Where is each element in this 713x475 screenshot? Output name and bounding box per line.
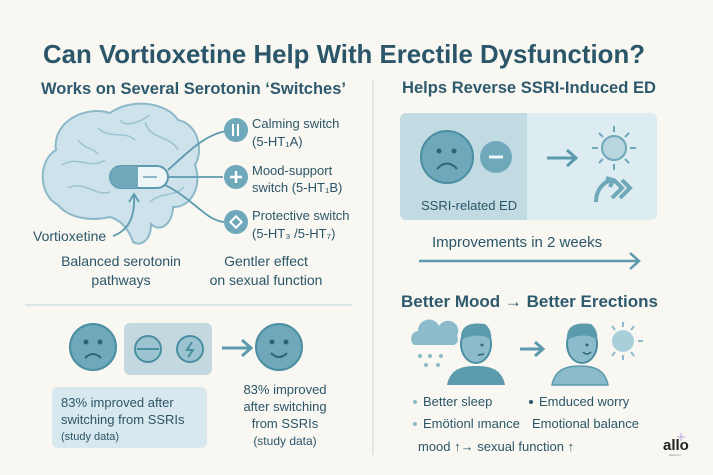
bullets: Emötionl ımance (423, 416, 520, 431)
panel: better mood (401, 292, 689, 457)
text: stat: 83% improved (243, 382, 327, 397)
callout box: (study data) (61, 431, 119, 443)
logo: allo: HEALTH (669, 453, 681, 457)
bullets: Emotional balance (532, 416, 639, 431)
panel: study results (52, 323, 327, 448)
text: switch labels: Protective switch (252, 208, 350, 223)
panel: reverse SSRI ED (400, 78, 657, 269)
heading: mood: Better Mood → Better Erections (401, 292, 658, 311)
text: stat: after switching (243, 399, 327, 414)
logo: allo: allo (663, 437, 689, 454)
icon: happy person (552, 323, 608, 385)
text: improvements: Improvements in 2 weeks (432, 234, 602, 251)
panel: serotonin switches: on sexual function (210, 272, 322, 288)
text: switch labels: Calming switch (252, 116, 339, 131)
title: Can Vortioxetine Help With Erectile Dysfunction? (43, 39, 645, 69)
arrow: timeline (419, 253, 639, 269)
icon: sun (612, 322, 643, 360)
text: gentler: Gentler effect (224, 253, 308, 269)
text: switch labels: Mood-support (252, 163, 333, 178)
arrow (520, 342, 543, 356)
icon: sad face (70, 324, 116, 370)
icon: protective switch (224, 210, 248, 234)
heading: switches: Works on Several Serotonin ‘Switches’ (41, 79, 346, 98)
bullets: Emduced worry (539, 394, 630, 409)
callout box: 83% improved after (61, 395, 174, 410)
text: balanced: Balanced serotonin (61, 253, 181, 269)
panel: serotonin switches (33, 79, 350, 288)
switch box (124, 323, 212, 375)
comparison card (400, 113, 657, 220)
icon: calming switch (224, 118, 248, 142)
icon: happy face (256, 324, 302, 370)
text: switch labels: switch (5-HT₁B) (252, 180, 342, 195)
comparison card: SSRI-related ED (421, 198, 517, 213)
icon: sad person (447, 323, 505, 385)
callout box: switching from SSRIs (61, 412, 185, 427)
text: stat (243, 382, 327, 448)
text: stat: from SSRIs (252, 416, 319, 431)
label: vortioxetine: Vortioxetine (33, 228, 106, 244)
arrow (222, 340, 251, 356)
bullets (413, 394, 639, 454)
bullets: mood ↑→ sexual function ↑ (418, 439, 574, 454)
text: switch labels (252, 116, 350, 241)
text: switch labels: (5-HT₁A) (252, 134, 303, 149)
bullets: Better sleep (423, 394, 492, 409)
text: stat: (study data) (253, 434, 317, 448)
icon: mood switch (224, 165, 248, 189)
heading: reverse: Helps Reverse SSRI-Induced ED (402, 78, 656, 97)
icon: pill (110, 166, 168, 188)
panel: serotonin switches: pathways (91, 272, 151, 288)
text: switch labels: (5-HT₃ /5-HT₇) (252, 226, 335, 241)
callout box (52, 387, 207, 448)
icon: brain (43, 104, 199, 244)
icon: rain cloud (411, 320, 458, 367)
